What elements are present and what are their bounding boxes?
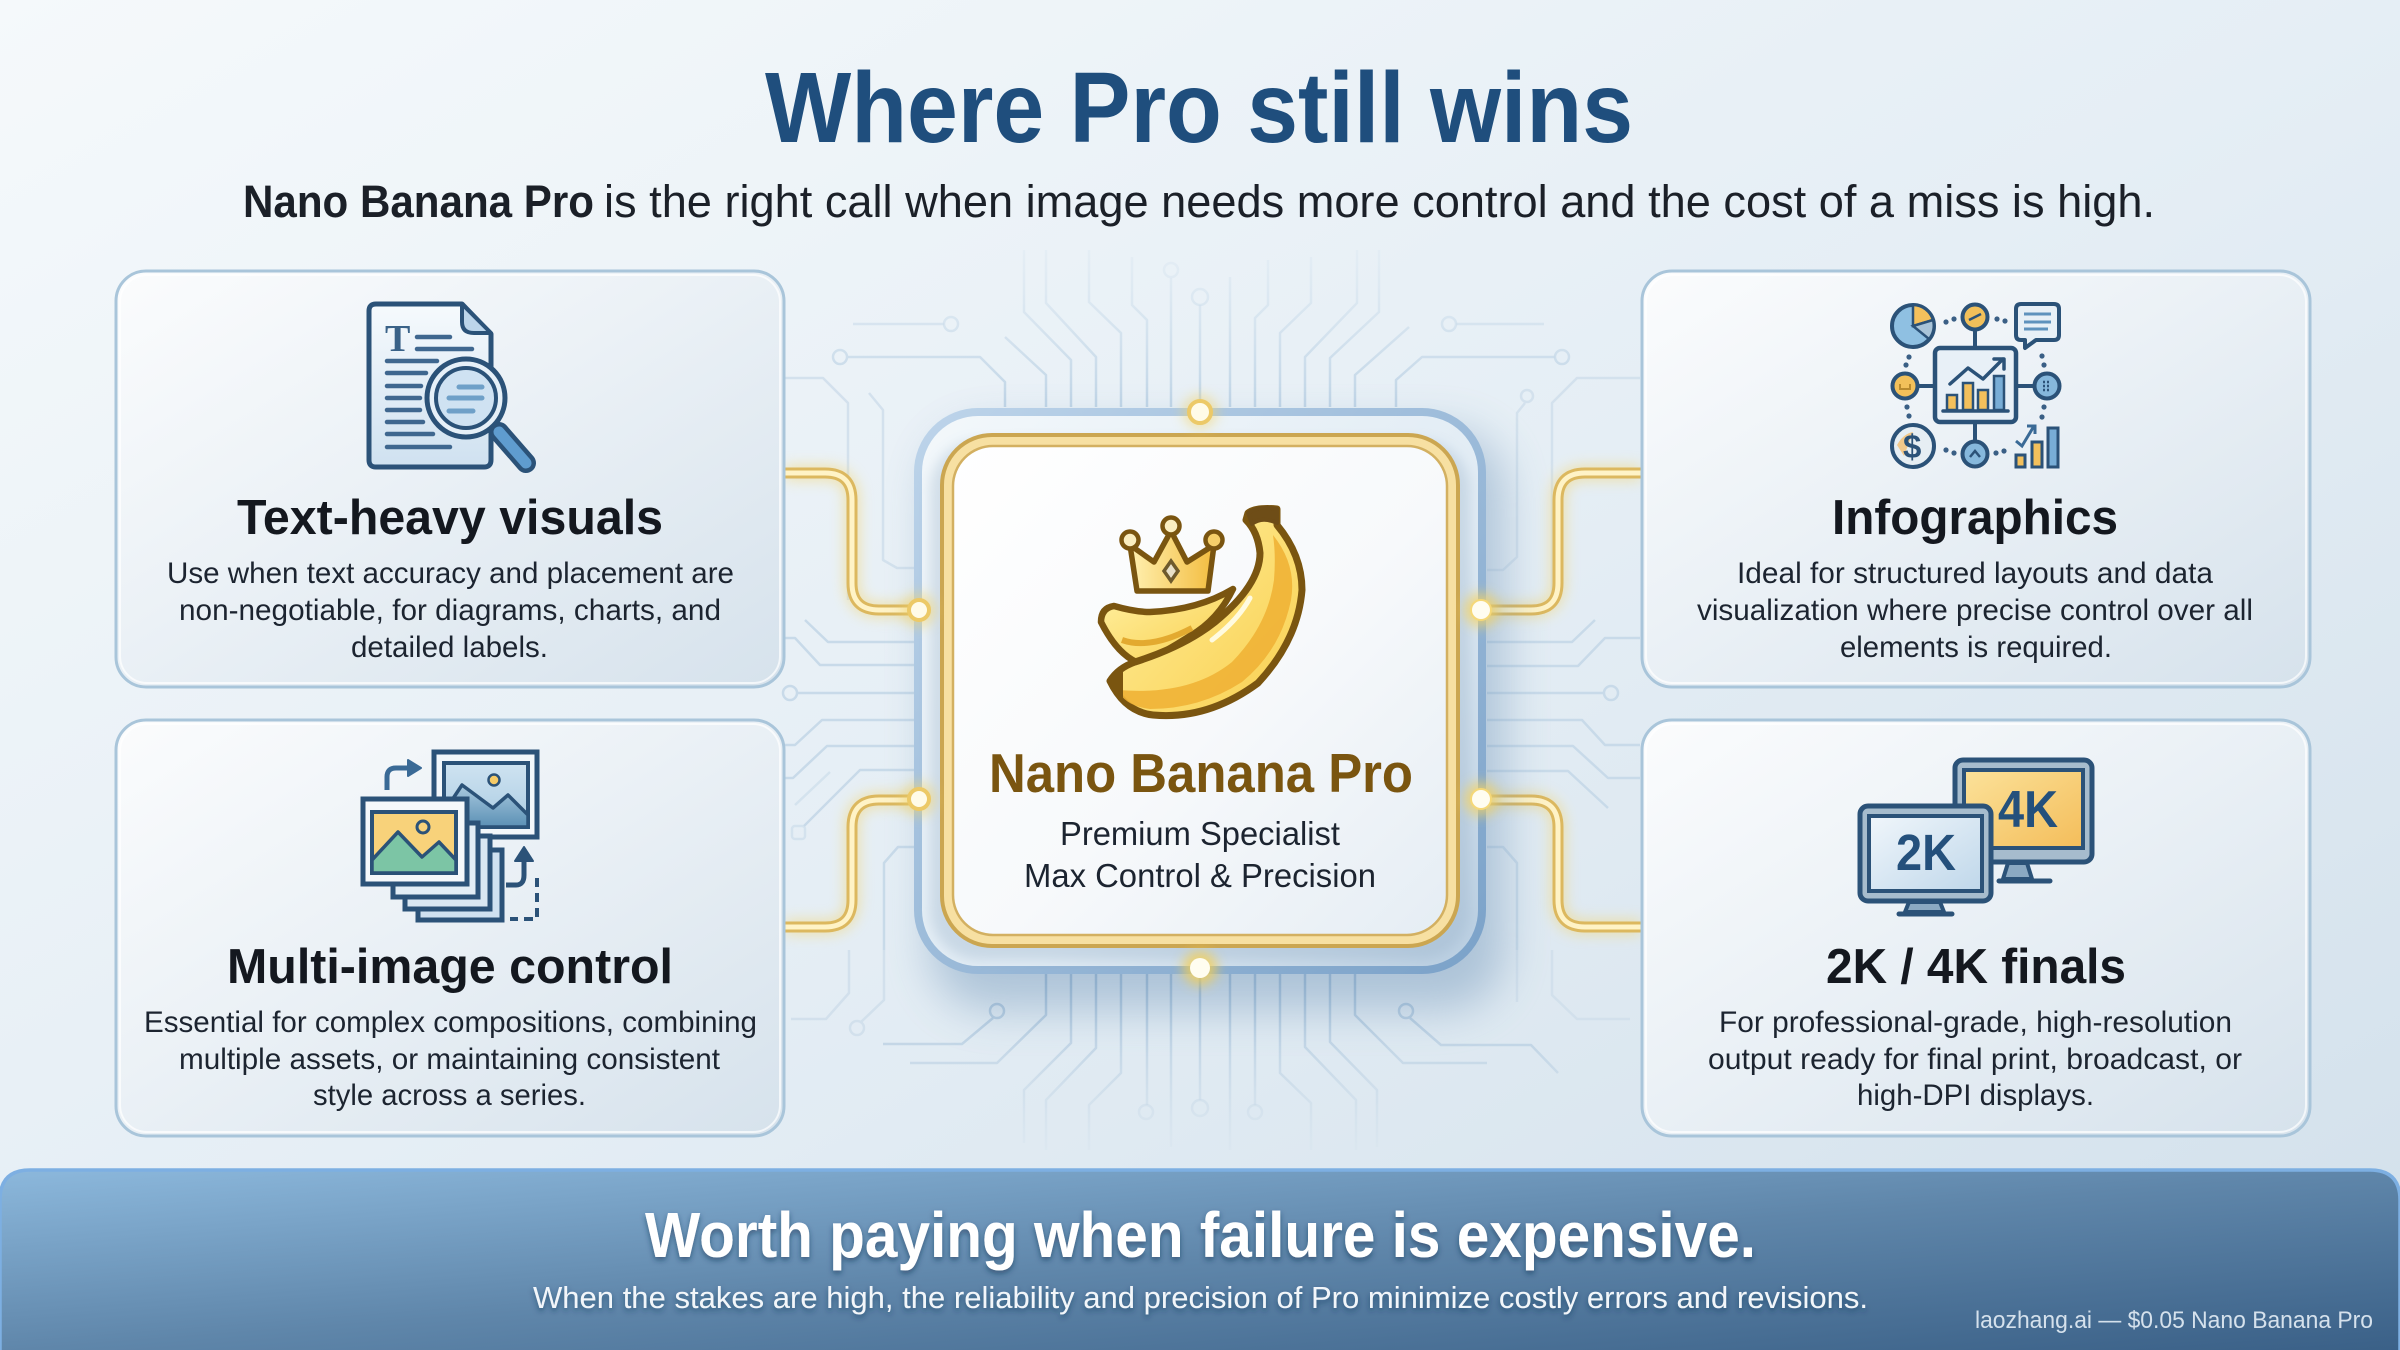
heading: Text-heavy visuals <box>237 491 663 545</box>
connector nodes <box>902 395 1498 985</box>
description: visualization where precise control over all <box>1697 594 2253 627</box>
icon: document with magnifier <box>369 304 526 467</box>
description: elements is required. <box>1840 631 2112 664</box>
circuit traces <box>783 250 1640 1150</box>
connector: bottom right <box>1485 800 1641 927</box>
description: detailed labels. <box>351 631 548 664</box>
description: For professional-grade, high-resolution <box>1719 1006 2232 1039</box>
center tagline: Premium Specialist <box>1060 815 1340 852</box>
icon: crown <box>1122 518 1222 591</box>
description: Use when text accuracy and placement are <box>167 557 734 590</box>
icon: 2K and 4K monitors <box>1860 760 2092 914</box>
subtitle: Nano Banana Pro <box>243 176 594 227</box>
banner subtext: When the stakes are high, the reliability and precision of Pro minimize costly errors and revisions. <box>533 1280 1868 1315</box>
icon: document with magnifier: T <box>385 318 410 360</box>
connector: top right <box>1485 473 1641 610</box>
panel: multi-image control <box>116 720 784 1136</box>
icon: crowned banana <box>1101 508 1302 716</box>
center name: Nano Banana Pro <box>989 742 1413 804</box>
title: Where Pro still wins <box>765 52 1633 164</box>
panel: infographics <box>1642 271 2310 687</box>
icon: 2K and 4K monitors: 2K <box>1896 824 1956 881</box>
icon: back banana <box>1101 589 1233 664</box>
subtitle: is the right call when image needs more control and the cost of a miss is high. <box>604 176 2155 227</box>
description: Ideal for structured layouts and data <box>1737 557 2213 590</box>
icon: data network <box>1892 304 2060 467</box>
icon: stacked images <box>363 752 537 920</box>
panel: text-heavy visuals <box>116 271 784 687</box>
description <box>1697 557 2253 664</box>
bottom traces <box>883 973 1558 1150</box>
icon: front banana <box>1110 508 1302 716</box>
description: style across a series. <box>313 1079 586 1112</box>
description: high-DPI displays. <box>1857 1079 2094 1112</box>
panel: center chip <box>918 412 1505 1010</box>
lower side traces <box>791 950 1630 1035</box>
heading: 2K / 4K finals <box>1826 940 2126 994</box>
center tagline <box>1024 815 1376 894</box>
connector: bottom left <box>785 800 915 927</box>
panel: 2K / 4K finals <box>1642 720 2310 1136</box>
heading: Infographics <box>1832 491 2118 545</box>
description <box>1708 1006 2242 1112</box>
center tagline: Max Control & Precision <box>1024 857 1376 894</box>
description: non-negotiable, for diagrams, charts, and <box>179 594 721 627</box>
description: multiple assets, or maintaining consistent <box>179 1043 721 1076</box>
description: output ready for final print, broadcast, or <box>1708 1043 2242 1076</box>
attribution: laozhang.ai — $0.05 Nano Banana Pro <box>1975 1307 2373 1334</box>
top traces <box>833 250 1569 407</box>
banner headline: Worth paying when failure is expensive. <box>645 1199 1756 1271</box>
middle side traces <box>783 620 1640 950</box>
heading: Multi-image control <box>227 940 673 994</box>
icon: 2K and 4K monitors: 4K <box>1998 781 2058 839</box>
description <box>144 1006 757 1112</box>
banner <box>0 1170 2400 1350</box>
icon: data network: $ <box>1903 428 1921 465</box>
description: Essential for complex compositions, combining <box>144 1006 757 1039</box>
connector: top left <box>785 473 915 610</box>
upper side traces <box>785 378 1640 600</box>
description <box>167 557 734 664</box>
